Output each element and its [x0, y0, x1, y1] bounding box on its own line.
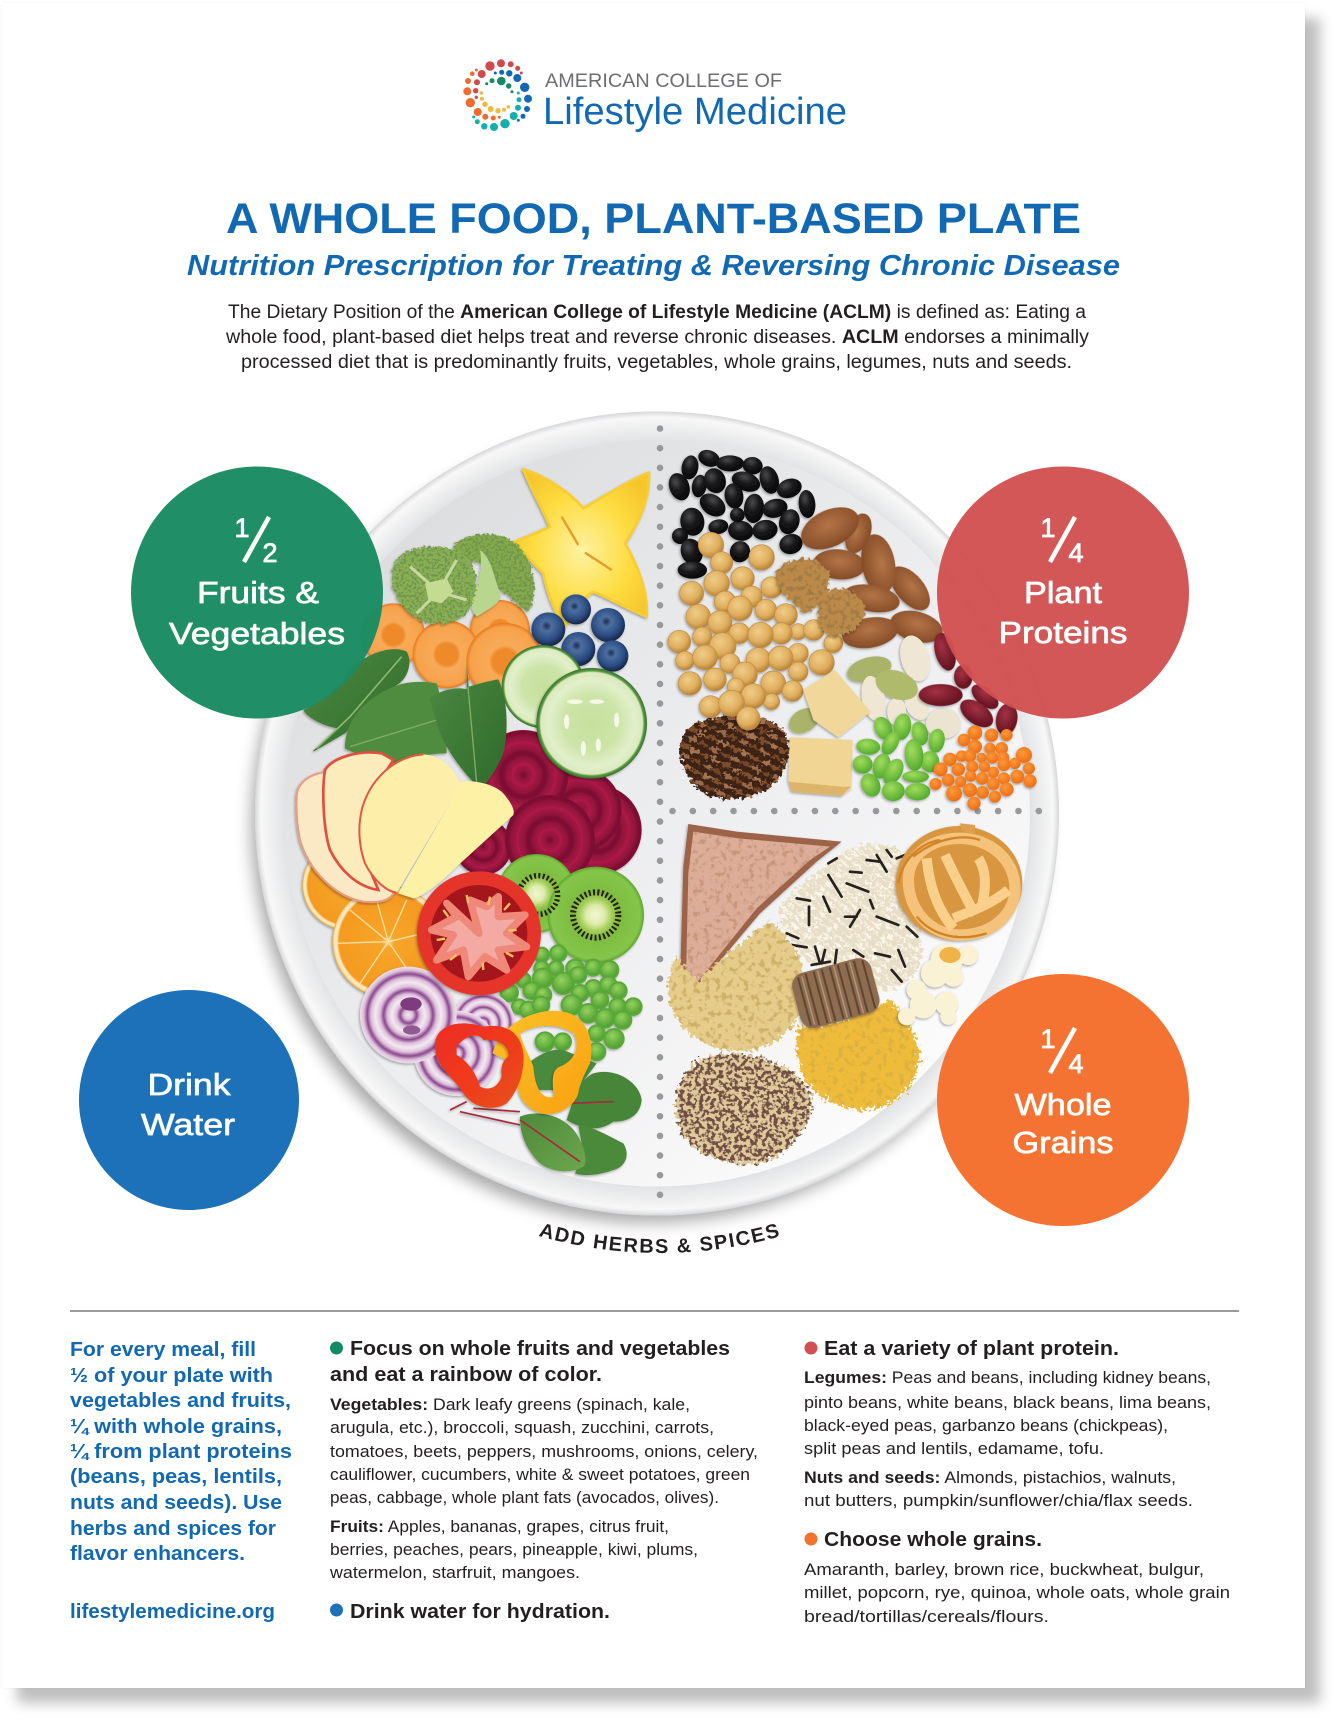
vegetables list: arugula, etc.), broccoli, squash, zucchini, carrots,: [330, 1418, 714, 1437]
fruits list: watermelon, starfruit, mangoes.: [329, 1563, 580, 1582]
left column: meal summary: vegetables and fruits,: [70, 1390, 291, 1412]
left column: meal summary: nuts and seeds). Use: [70, 1492, 282, 1514]
title: A WHOLE FOOD, PLANT-BASED PLATE: [226, 195, 1081, 243]
fruits list: berries, peaches, pears, pineapple, kiwi, plums,: [330, 1540, 698, 1559]
fruits list: Fruits: Apples, bananas, grapes, citrus fruit,: [330, 1517, 669, 1536]
tomato slice: [417, 871, 541, 995]
website: lifestylemedicine.org: [70, 1601, 275, 1623]
subtitle: Nutrition Prescription for Treating & Reversing Chronic Disease: [187, 250, 1120, 282]
food: fruits and vegetables half: [303, 469, 649, 885]
intro paragraph: processed diet that is predominantly fruits, vegetables, whole grains, legumes, nuts and seeds.: [241, 352, 1072, 373]
chickpeas: [668, 532, 843, 730]
heading: [330, 1337, 730, 1386]
fraction one quarter: 4: [1068, 1049, 1084, 1079]
kidney beans: [919, 630, 1020, 737]
grains list: [804, 1560, 1230, 1626]
protein heading: Eat a variety of plant protein.: [824, 1337, 1119, 1360]
curved caption: add herbs and spices: ADD HERBS & SPICES: [538, 1224, 779, 1254]
fraction one half: 2: [262, 538, 278, 568]
legumes list: split peas and lentils, edamame, tofu.: [804, 1439, 1104, 1458]
logo text top: AMERICAN COLLEGE OF: [545, 70, 782, 92]
quinoa: [675, 1053, 812, 1164]
pasta nest: [896, 823, 1022, 941]
food: apples, oranges, tomato and lower vegetables: [296, 752, 644, 1175]
bulgur: [796, 1000, 919, 1110]
broccoli: [392, 534, 534, 623]
logo text bottom: Lifestyle Medicine: [543, 91, 847, 133]
left column: meal summary: For every meal, fill: [70, 1339, 256, 1361]
label: [998, 575, 1128, 650]
grains list: Amaranth, barley, brown rice, buckwheat, bulgur,: [804, 1560, 1204, 1579]
fraction one quarter: [1040, 513, 1084, 568]
circle: quarter plant proteins: [937, 466, 1189, 718]
popcorn: [898, 944, 978, 1025]
pumpkin seeds: [784, 632, 961, 739]
logo: [463, 59, 847, 133]
middle column: fruits and vegetables: [329, 1337, 758, 1623]
fruits list: [329, 1517, 698, 1582]
intro paragraph: [225, 302, 1090, 373]
kiwi slices: [497, 854, 644, 963]
nuts list: nut butters, pumpkin/sunflower/chia/flax seeds.: [804, 1491, 1193, 1510]
bullet red: [804, 1342, 818, 1354]
fraction one quarter: 4: [1068, 538, 1084, 568]
food: plant proteins quarter: [665, 447, 1037, 810]
bullet orange: [804, 1532, 818, 1546]
onion slices: [360, 967, 515, 1096]
left column: meal summary: herbs and spices for: [70, 1518, 276, 1540]
heading: Focus on whole fruits and vegetables: [350, 1337, 730, 1360]
red lentils: [930, 725, 1037, 810]
fraction one half: 1: [234, 513, 250, 543]
tofu cubes: [788, 670, 871, 796]
right column: protein and grains: [804, 1337, 1230, 1626]
vegetables list: [330, 1395, 758, 1507]
grains list: millet, popcorn, rye, quinoa, whole oats, whole grain: [804, 1583, 1230, 1602]
spinach leaves: [303, 649, 507, 789]
fraction one half: [234, 513, 278, 568]
label: [141, 1067, 235, 1142]
plate: [251, 412, 1059, 1223]
circle: drink water: [79, 990, 299, 1210]
left column: meal summary: flavor enhancers.: [70, 1543, 245, 1565]
legumes list: [804, 1368, 1211, 1458]
yellow bell pepper ring: [493, 1011, 591, 1114]
label: Proteins: [998, 615, 1128, 650]
vegetables list: tomatoes, beets, peppers, mushrooms, onions, celery,: [330, 1442, 758, 1461]
shredded wheat: [789, 955, 883, 1031]
star fruit: [515, 469, 649, 627]
orange slices: [302, 840, 444, 998]
label: Fruits &: [197, 575, 319, 610]
left column: meal summary: (beans, peas, lentils,: [70, 1466, 282, 1488]
oats: [668, 920, 805, 1051]
peas: [501, 945, 642, 1060]
food: whole grains quarter: [668, 823, 1022, 1164]
bullet blue: [330, 1604, 343, 1616]
left column: meal summary: [70, 1339, 292, 1565]
fraction one quarter: [1040, 1024, 1084, 1079]
fraction one quarter: 1: [1040, 513, 1056, 543]
circle: half fruits and vegetables: [131, 466, 383, 718]
edamame: [853, 712, 947, 801]
left column: meal summary: ½ of your plate with: [70, 1365, 273, 1387]
grains list: bread/tortillas/cereals/flours.: [804, 1607, 1049, 1626]
chard leaves: [450, 1050, 642, 1175]
legumes list: black-eyed peas, garbanzo beans (chickpeas),: [804, 1416, 1168, 1435]
logo mark: ring of coloured dots: [463, 59, 532, 131]
walnuts: [775, 558, 865, 637]
grains heading: Choose whole grains.: [824, 1528, 1042, 1551]
left column: meal summary: ¼ from plant proteins: [70, 1441, 292, 1463]
label: [169, 575, 345, 651]
fraction one quarter: 1: [1040, 1024, 1056, 1054]
drink water heading: Drink water for hydration.: [350, 1600, 610, 1623]
legumes list: Legumes: Peas and beans, including kidney beans,: [804, 1368, 1211, 1387]
legumes list: pinto beans, white beans, black beans, lima beans,: [804, 1393, 1211, 1412]
label: Whole: [1014, 1087, 1112, 1122]
label: Plant: [1024, 575, 1102, 610]
apple slices: [296, 752, 514, 902]
label: Grains: [1012, 1125, 1114, 1160]
wild rice blend: [779, 843, 922, 991]
black beans: [665, 447, 817, 579]
intro paragraph: The Dietary Position of the American College of Lifestyle Medicine (ACLM) is defined as: Eating a: [228, 302, 1086, 323]
almonds: [794, 499, 946, 652]
label: [1012, 1087, 1114, 1160]
bullet green: [330, 1342, 343, 1354]
vegetables list: Vegetables: Dark leafy greens (spinach, kale,: [330, 1395, 690, 1414]
label: Vegetables: [169, 616, 345, 651]
red bell pepper ring: [435, 1023, 524, 1108]
bread slice: [680, 824, 842, 993]
intro paragraph: whole food, plant-based diet helps treat and reverse chronic diseases. ACLM endorses a minimally: [225, 327, 1090, 348]
heading: and eat a rainbow of color.: [330, 1363, 602, 1386]
circle: quarter whole grains: [937, 974, 1189, 1226]
vegetables list: cauliflower, cucumbers, white & sweet potatoes, green: [330, 1465, 750, 1484]
label: Drink: [148, 1067, 231, 1102]
left column: meal summary: ¼ with whole grains,: [70, 1416, 282, 1438]
vegetables list: peas, cabbage, whole plant fats (avocados, olives).: [330, 1488, 719, 1507]
beets: [455, 730, 642, 885]
flax seeds: [681, 715, 788, 799]
cucumber back slice: [502, 645, 585, 728]
divider: [70, 1310, 1239, 1312]
label: Water: [141, 1107, 235, 1142]
nuts list: Nuts and seeds: Almonds, pistachios, walnuts,: [804, 1468, 1176, 1487]
nuts list: [804, 1468, 1193, 1510]
blueberries: [531, 594, 628, 672]
carrots: [362, 600, 544, 700]
cucumber front slice: [536, 668, 647, 779]
